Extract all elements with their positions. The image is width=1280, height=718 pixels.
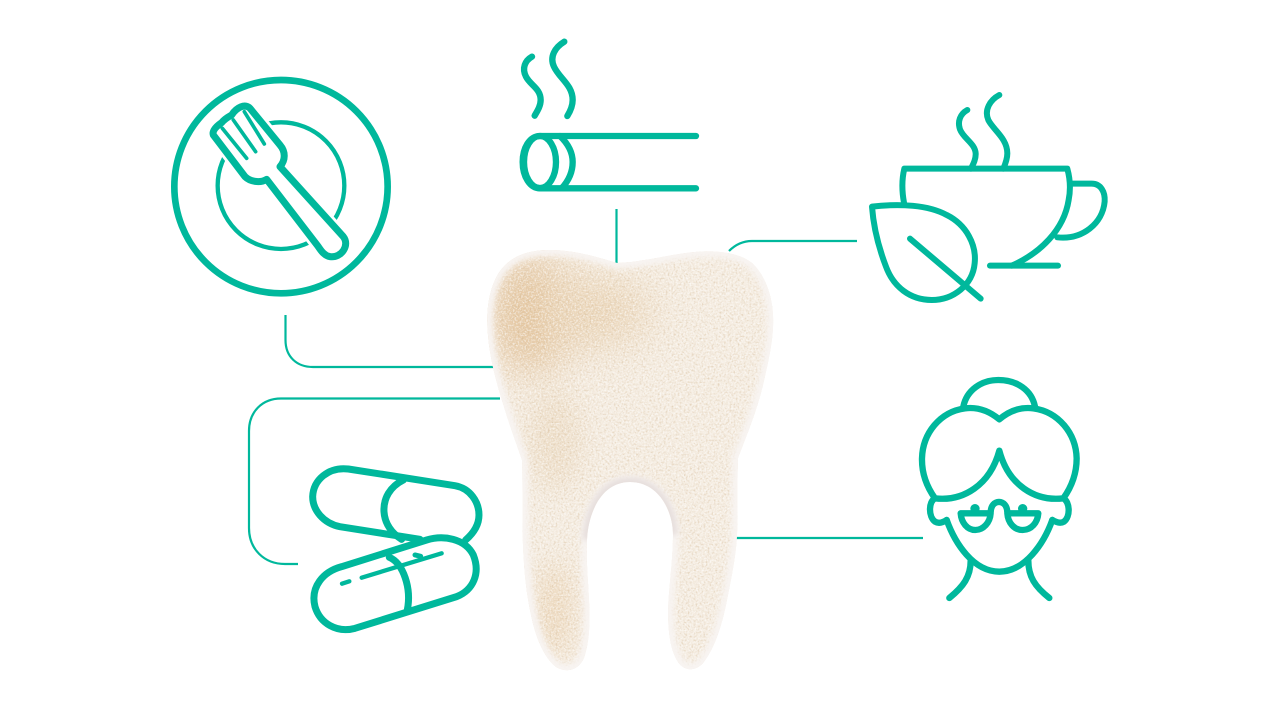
tooth: [487, 250, 774, 670]
hair: [922, 408, 1077, 499]
connector: capsules to tooth: [249, 398, 500, 564]
eyes: [970, 504, 980, 513]
cigarette end ellipse: [524, 136, 556, 188]
steam left: [959, 110, 976, 169]
cigarette band: [560, 136, 573, 188]
lower capsule: [314, 538, 476, 630]
upper capsule: [313, 469, 479, 540]
fork: [213, 106, 346, 257]
saucer: [990, 257, 1058, 275]
hair bun: [963, 380, 1035, 407]
leaf vein: [910, 239, 981, 299]
cup handle: [1057, 184, 1105, 238]
leaf: [872, 205, 975, 300]
lower capsule band: [389, 557, 408, 610]
icon: capsules: [313, 469, 479, 630]
highlight long: [362, 553, 442, 578]
right ear: [1052, 498, 1069, 523]
smoke right: [552, 42, 573, 116]
plate rim: [174, 80, 388, 293]
smoke left: [524, 57, 541, 116]
icon: cigarette with smoke: [523, 42, 696, 188]
upper capsule band: [384, 480, 403, 539]
left ear: [930, 498, 947, 523]
highlight short: [342, 581, 349, 584]
glasses: [961, 502, 1038, 530]
infographic: causes of tooth staining: [171, 38, 1108, 670]
connector: plate to tooth: [286, 315, 494, 367]
cup: [902, 169, 1070, 266]
connector: tea to tooth: [729, 241, 857, 251]
icon: elderly woman: [922, 380, 1077, 598]
icon: plate and fork: [174, 80, 388, 293]
plate inner circle: [218, 122, 344, 249]
connector: cigarette to tooth: [615, 209, 618, 264]
cigarette body: [523, 136, 696, 188]
connector: elderly woman to tooth: [736, 537, 923, 539]
right neck: [1028, 561, 1049, 598]
icon: tea cup and leaf: [872, 95, 1105, 300]
face: [947, 520, 1052, 572]
steam right: [987, 95, 1007, 169]
highlight dot: [415, 555, 421, 556]
left neck: [949, 561, 971, 598]
